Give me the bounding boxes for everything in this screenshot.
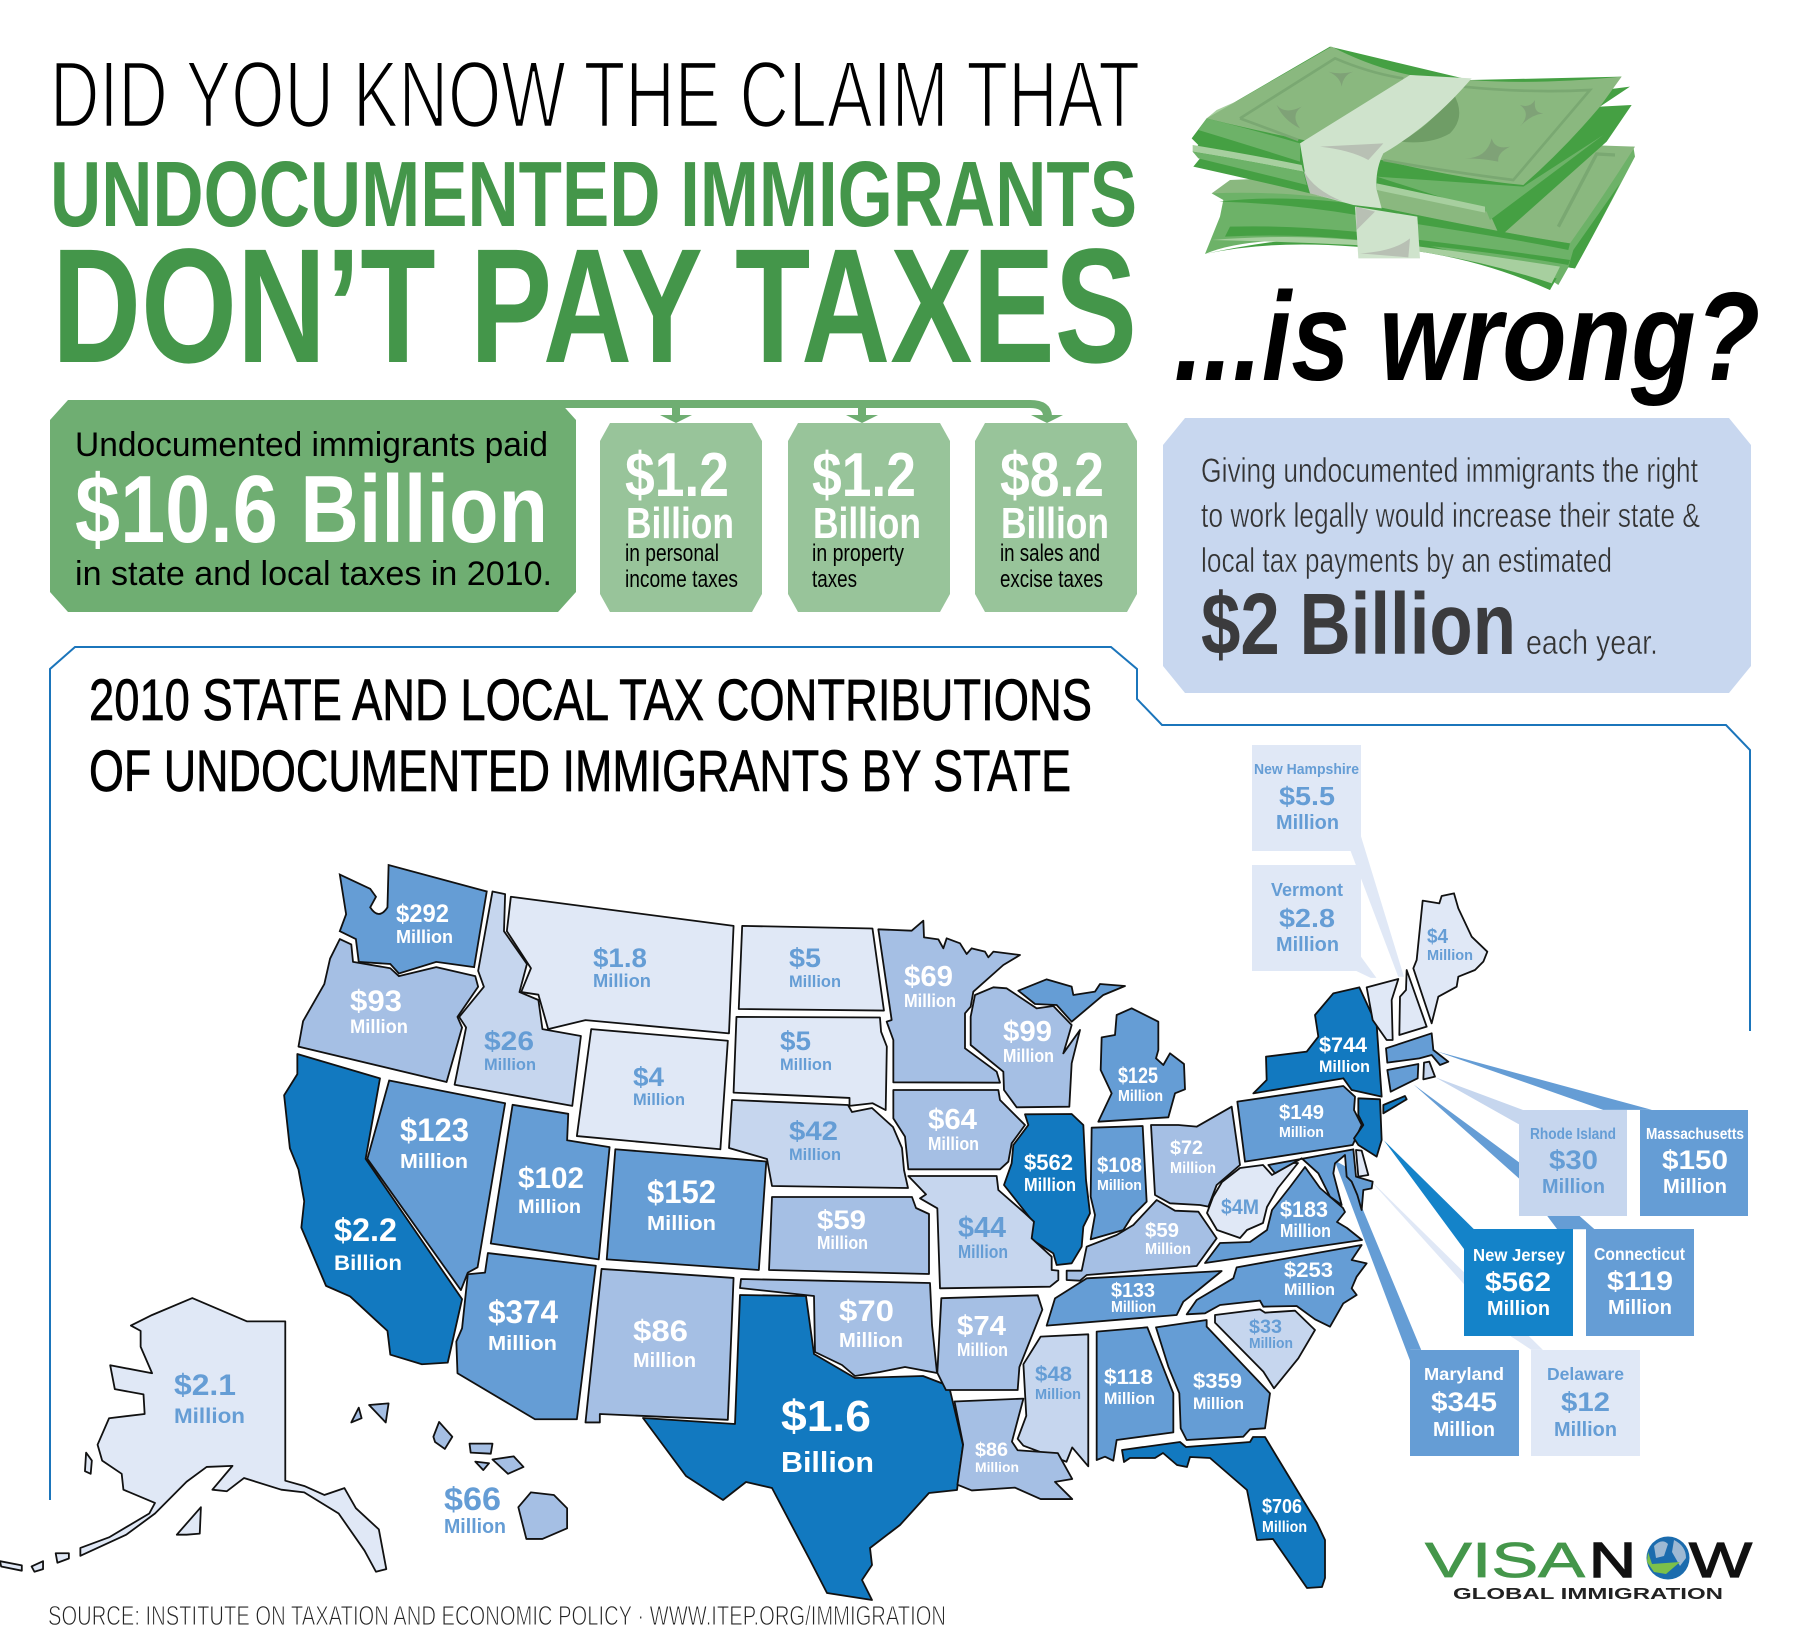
state: Florida (1122, 1437, 1325, 1588)
callout: Massachusetts: Massachusetts (1646, 1126, 1744, 1143)
state: Louisiana: Million (975, 1459, 1019, 1475)
logo: VisaNow (1425, 1534, 1753, 1603)
panel: sales and excise taxes: in sales and (1000, 540, 1100, 567)
state: Iowa (893, 1090, 1025, 1169)
state: Oklahoma: Million (839, 1330, 903, 1352)
state: Utah: Million (518, 1197, 581, 1218)
icon: globe (1646, 1536, 1690, 1580)
state: Alaska: $2.1 (174, 1369, 236, 1402)
state: Oregon: $93 (350, 985, 402, 1018)
callout: New Jersey: $562 (1485, 1267, 1551, 1297)
state: Connecticut (1387, 1064, 1418, 1092)
state: New York (1253, 987, 1407, 1113)
callout: New Jersey: Million (1487, 1298, 1550, 1320)
state: Wisconsin: Million (1003, 1046, 1054, 1066)
state: Louisiana (955, 1399, 1072, 1499)
state: Arizona: $374 (488, 1294, 558, 1330)
callout: Vermont: Vermont (1271, 880, 1343, 900)
icon: stack of money (1192, 47, 1635, 290)
state: Colorado: Million (647, 1213, 716, 1235)
state: Delaware (1356, 1150, 1368, 1177)
state: Arkansas: Million (957, 1340, 1008, 1360)
callout: Delaware (1531, 1350, 1640, 1456)
state: Montana: Million (593, 971, 651, 991)
state: Minnesota (878, 921, 1020, 1083)
number: 10.6 billion: $10.6 Billion (75, 456, 548, 563)
state: Wisconsin (971, 987, 1080, 1107)
state: Indiana (1091, 1126, 1147, 1239)
state: Virginia: $183 (1280, 1197, 1328, 1222)
callout: Rhode Island: Rhode Island (1530, 1126, 1616, 1143)
state: Alabama (1097, 1327, 1173, 1461)
state: North Dakota (739, 926, 884, 1011)
state: Florida: Million (1262, 1519, 1307, 1536)
callout: Connecticut: Connecticut (1594, 1244, 1685, 1264)
panel: right to work estimate: each year. (1526, 624, 1658, 662)
state: New Hampshire (1399, 970, 1427, 1035)
state: Kansas: Million (817, 1233, 868, 1253)
source line: SOURCE: INSTITUTE ON TAXATION AND ECONOMIC POLICY · WWW.ITEP.ORG/IMMIGRATION (48, 1600, 946, 1631)
state: Nevada: $123 (400, 1112, 469, 1148)
panel: property taxes (788, 423, 950, 612)
state: Rhode Island (1423, 1062, 1435, 1079)
state: Arizona: Million (488, 1333, 557, 1355)
state: Vermont (1367, 979, 1398, 1040)
callout: Vermont: $2.8 (1279, 903, 1335, 933)
state: Kentucky: Million (1145, 1241, 1191, 1258)
logo: VisaNow: W (1689, 1534, 1753, 1588)
panel: sales and excise taxes (975, 423, 1137, 612)
state: Wyoming (577, 1029, 728, 1149)
state: Missouri: $44 (958, 1212, 1006, 1244)
state: Massachusetts (1386, 1033, 1448, 1065)
state: Illinois: $562 (1024, 1150, 1073, 1175)
state: California (284, 1054, 462, 1364)
text: undocumented immigrants paid: Undocumented immigrants paid (75, 426, 548, 464)
state: Missouri (908, 1176, 1058, 1288)
state: New Mexico: Million (633, 1350, 696, 1372)
state: North Dakota: Million (789, 972, 841, 991)
state: Hawaii: Million (444, 1516, 506, 1538)
state: Pennsylvania: Million (1279, 1124, 1324, 1141)
state: Wyoming: $4 (633, 1062, 664, 1092)
state: Idaho (455, 891, 581, 1106)
state: Idaho: $26 (484, 1026, 534, 1056)
logo: VisaNow: GLOBAL IMMIGRATION (1453, 1586, 1723, 1603)
state: South Dakota (734, 1017, 887, 1110)
callout: Massachusetts: $150 (1662, 1145, 1728, 1175)
state: Kansas: $59 (817, 1205, 866, 1235)
panel: personal income taxes: Billion (626, 499, 734, 548)
state: Wyoming: Million (633, 1090, 685, 1109)
state: New York: $744 (1319, 1034, 1367, 1057)
callout: Connecticut: Million (1608, 1297, 1672, 1319)
callout: Maryland (1410, 1350, 1519, 1456)
state: Indiana: Million (1097, 1177, 1142, 1194)
state: New York: Million (1319, 1057, 1370, 1076)
state: Michigan (1018, 979, 1185, 1122)
state: Mississippi: $48 (1035, 1363, 1072, 1386)
state: Mississippi: Million (1035, 1386, 1081, 1403)
state: Iowa: $64 (928, 1104, 977, 1136)
state: Washington: $292 (396, 900, 449, 928)
panel: personal income taxes: $1.2 (625, 441, 729, 510)
state: Hawaii (351, 1403, 567, 1539)
state: California: Billion (334, 1252, 402, 1275)
state: Maine: Million (1427, 947, 1473, 964)
callout: Maryland: Million (1433, 1419, 1495, 1441)
state: Missouri: Million (958, 1242, 1008, 1262)
state: Nebraska: Million (789, 1145, 841, 1164)
logo: VisaNow: VISA (1425, 1534, 1585, 1588)
state: South Dakota: $5 (780, 1026, 811, 1056)
state: New Jersey (1354, 1098, 1382, 1157)
state: Montana (507, 897, 734, 1033)
callout: Massachusetts: Million (1663, 1176, 1727, 1198)
state: Colorado (607, 1149, 766, 1270)
state: Oklahoma (740, 1279, 937, 1376)
state: Texas: Billion (781, 1447, 874, 1479)
callout: Delaware: $12 (1561, 1387, 1610, 1417)
state: Washington (340, 865, 487, 974)
state: Michigan: Million (1118, 1088, 1163, 1105)
state: South Dakota: Million (780, 1055, 832, 1074)
callout: Connecticut (1586, 1229, 1694, 1336)
state: Ohio (1151, 1107, 1240, 1207)
state: Alabama: Million (1104, 1389, 1155, 1408)
callout leader wedges (1335, 836, 1652, 1361)
state: Illinois (1004, 1114, 1090, 1265)
panel: personal income taxes (600, 423, 762, 612)
state: Kentucky: $59 (1145, 1220, 1179, 1242)
state: West Virginia (1207, 1163, 1298, 1238)
panel: total taxes paid (50, 400, 1063, 612)
title line 2: UNDOCUMENTED IMMIGRANTS (50, 142, 1137, 246)
state: Nebraska: $42 (789, 1116, 838, 1146)
state: Minnesota: $69 (904, 961, 953, 993)
callout: Rhode Island: Million (1542, 1176, 1605, 1198)
title line 3: DON’T PAY TAXES (52, 214, 1137, 397)
state: Texas: $1.6 (781, 1392, 871, 1441)
heading: map title: OF UNDOCUMENTED IMMIGRANTS BY STATE (89, 739, 1071, 804)
state: Ohio: $72 (1170, 1138, 1203, 1159)
state: Hawaii: $66 (444, 1481, 501, 1517)
callout: Massachusetts (1640, 1110, 1748, 1216)
state: Georgia (1156, 1320, 1270, 1440)
state: Tennessee (1047, 1271, 1222, 1326)
state: North Carolina (1187, 1245, 1367, 1327)
callout: Delaware: Delaware (1547, 1364, 1624, 1384)
panel: property taxes: Billion (813, 499, 921, 548)
callout: Connecticut: $119 (1607, 1266, 1673, 1296)
state: Utah (491, 1105, 610, 1259)
state: Washington: Million (396, 927, 453, 947)
callout: New Hampshire: Million (1276, 812, 1339, 834)
state: North Carolina: Million (1284, 1280, 1335, 1299)
state: Maine: $4 (1427, 926, 1449, 948)
title line 1: DID YOU KNOW THE CLAIM THAT (50, 42, 1140, 148)
panel: sales and excise taxes: $8.2 (1000, 441, 1104, 510)
state: Kentucky (1067, 1200, 1217, 1281)
state: Illinois: Million (1024, 1175, 1076, 1195)
state: Ohio: Million (1170, 1160, 1216, 1177)
state: Nevada: Million (400, 1151, 468, 1173)
callout: Maryland: Maryland (1424, 1364, 1504, 1384)
state: New Mexico (585, 1269, 734, 1422)
state: Iowa: Million (928, 1134, 979, 1154)
state: Utah: $102 (518, 1162, 584, 1195)
callout: New Jersey: New Jersey (1473, 1245, 1565, 1265)
state: Arkansas (937, 1295, 1042, 1390)
state: Nebraska (729, 1100, 908, 1188)
state: Pennsylvania: $149 (1279, 1102, 1324, 1124)
state: Maryland (1268, 1149, 1373, 1210)
callout: Rhode Island: $30 (1549, 1145, 1598, 1175)
state: Louisiana: $86 (975, 1440, 1008, 1461)
state: Virginia: Million (1280, 1221, 1331, 1241)
state: Kansas (769, 1197, 929, 1274)
panel: property taxes: taxes (812, 566, 857, 593)
state: California: $2.2 (334, 1212, 397, 1248)
state: South Carolina: $33 (1249, 1317, 1282, 1338)
panel: right to work estimate: $2 Billion (1201, 576, 1516, 673)
state: North Carolina: $253 (1284, 1259, 1333, 1282)
state: Mississippi (1018, 1334, 1088, 1466)
state: Georgia: Million (1193, 1394, 1244, 1413)
state: Nevada (367, 1080, 505, 1290)
state: Oregon (298, 939, 478, 1082)
state: Minnesota: Million (904, 991, 956, 1011)
panel border: map section (50, 647, 1750, 1500)
state: Pennsylvania (1237, 1086, 1362, 1162)
state: Georgia: $359 (1193, 1370, 1242, 1393)
state: Texas (643, 1295, 963, 1600)
title (50, 42, 1140, 397)
text: in state and local taxes: in state and local taxes in 2010. (75, 555, 552, 593)
panel: right to work estimate: local tax payments by an estimated (1201, 542, 1612, 580)
callout: Vermont (1252, 865, 1361, 971)
heading: map title: 2010 STATE AND LOCAL TAX CONTRIBUTIONS (89, 668, 1092, 733)
state: Oregon: Million (350, 1017, 408, 1038)
panel: personal income taxes: income taxes (625, 566, 738, 593)
state: Maine (1413, 893, 1487, 1023)
panel: right to work estimate (1163, 418, 1751, 693)
logo: VisaNow: N (1589, 1534, 1636, 1588)
panel: property taxes: $1.2 (812, 441, 916, 510)
callout: New Hampshire (1252, 745, 1361, 851)
callout: Maryland: $345 (1431, 1387, 1497, 1417)
callout: New Hampshire: New Hampshire (1254, 761, 1359, 778)
state: South Carolina (1215, 1309, 1315, 1388)
state: Alaska (0, 1298, 386, 1572)
state: Montana: $1.8 (593, 943, 647, 973)
state: Tennessee: Million (1111, 1299, 1156, 1316)
state: Florida: $706 (1262, 1496, 1302, 1518)
state: Tennessee: $133 (1111, 1280, 1155, 1302)
callout: Delaware: Million (1554, 1419, 1617, 1441)
panel: sales and excise taxes: Billion (1001, 499, 1109, 548)
state: New Mexico: $86 (633, 1315, 688, 1348)
state: Idaho: Million (484, 1055, 536, 1074)
callout: Vermont: Million (1276, 934, 1339, 956)
map of US states (0, 865, 1487, 1600)
state: Arkansas: $74 (957, 1310, 1006, 1341)
state: Indiana: $108 (1097, 1154, 1142, 1177)
callout: New Jersey (1464, 1229, 1573, 1336)
state: Michigan: $125 (1118, 1063, 1158, 1088)
heading: map title (89, 668, 1092, 804)
state: Alabama: $118 (1104, 1366, 1153, 1389)
panel: sales and excise taxes: excise taxes (1000, 566, 1103, 593)
state: Colorado: $152 (647, 1174, 716, 1210)
state: North Dakota: $5 (789, 943, 821, 973)
state: South Carolina: Million (1249, 1335, 1293, 1352)
callout: New Hampshire: $5.5 (1279, 781, 1335, 811)
state: Arizona (456, 1253, 596, 1419)
state: West Virginia: $4M (1221, 1196, 1259, 1219)
state: Alaska: Million (174, 1405, 245, 1428)
panel: property taxes: in property (812, 540, 904, 567)
state: Oklahoma: $70 (839, 1295, 894, 1328)
arrows to breakdown boxes (555, 400, 1063, 423)
state: Virginia (1205, 1167, 1362, 1263)
callout: Rhode Island (1519, 1110, 1627, 1216)
state: Wisconsin: $99 (1003, 1016, 1052, 1048)
panel: personal income taxes: in personal (625, 540, 719, 567)
